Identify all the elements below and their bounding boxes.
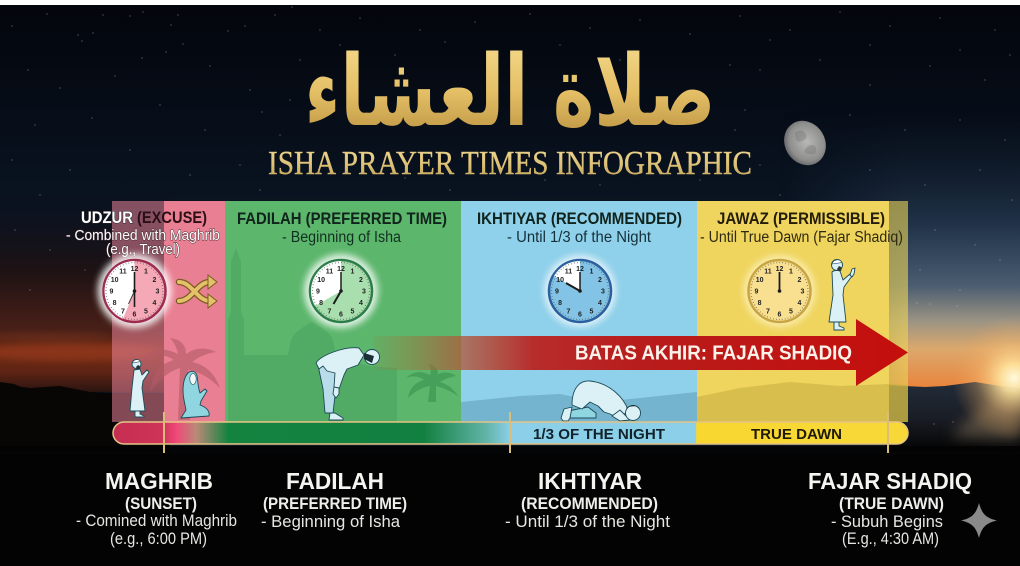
clock: udzur: 3	[156, 288, 160, 296]
clock: fadilah: 7	[328, 308, 332, 315]
clock: jawaz: 12	[776, 266, 783, 273]
label: maghrib: (e.g., 6:00 PM)	[110, 530, 207, 548]
clock: fadilah: 10	[317, 277, 325, 284]
clock: udzur: 10	[111, 277, 119, 284]
icon: sparkle	[961, 503, 997, 538]
clock: udzur: 6	[133, 312, 137, 318]
clock: ikhtiyar: 5	[590, 308, 594, 315]
heading: ikhtiyar: - Until 1/3 of the Night	[507, 229, 652, 246]
clock: jawaz: 1	[789, 269, 793, 276]
label: ikhtiyar	[505, 468, 670, 531]
figure: prostrating man	[561, 381, 640, 421]
clock: jawaz: 11	[764, 269, 772, 276]
clock: jawaz: 2	[797, 277, 801, 284]
panel: ikhtiyar	[461, 201, 697, 422]
clock: fadilah: 3	[362, 288, 366, 296]
clock: ikhtiyar: 1	[590, 269, 594, 276]
panel: fadilah	[225, 201, 461, 422]
label: maghrib: - Comined with Maghrib	[76, 512, 237, 530]
figure: standing man, jawaz	[829, 260, 855, 330]
figure: bowing man	[316, 348, 380, 420]
heading: fadilah	[237, 210, 447, 246]
clock: jawaz: 5	[789, 308, 793, 315]
clock: ikhtiyar: 8	[558, 300, 562, 307]
clock: udzur: 7	[121, 308, 125, 315]
timeline bar	[113, 412, 908, 453]
clock: udzur: 12	[131, 266, 138, 273]
clock: ikhtiyar	[544, 255, 616, 327]
clock: ikhtiyar: 11	[565, 269, 572, 276]
clock: jawaz: 9	[755, 288, 759, 296]
clock: fadilah: 5	[351, 308, 355, 315]
bar label: one third of the night: 1/3 OF THE NIGHT	[533, 426, 665, 443]
clock: jawaz: 7	[766, 308, 770, 315]
bar label: true dawn: TRUE DAWN	[751, 426, 842, 443]
clock: udzur: 11	[119, 269, 127, 276]
clock: jawaz: 10	[756, 277, 764, 284]
label: fadilah	[261, 468, 407, 531]
clock: ikhtiyar: 4	[598, 300, 602, 307]
panel: udzur	[112, 201, 225, 422]
clock: ikhtiyar: 6	[578, 312, 582, 318]
label: ikhtiyar: - Until 1/3 of the Night	[505, 513, 670, 531]
clock: jawaz: 3	[801, 288, 805, 296]
clock: jawaz	[744, 255, 816, 327]
arrow: batas akhir	[373, 319, 908, 386]
heading: fadilah: - Beginning of Isha	[282, 229, 401, 246]
palm silhouette: udzur	[140, 338, 220, 420]
label: fadilah: - Beginning of Isha	[261, 513, 401, 531]
clock: jawaz: 4	[797, 300, 801, 307]
heading: fadilah: FADILAH (PREFERRED TIME)	[237, 210, 447, 228]
label: fajar shadiq: FAJAR SHADIQ	[808, 468, 972, 494]
clock: udzur: 8	[113, 300, 117, 307]
clock: ikhtiyar: 3	[601, 288, 605, 296]
panel: jawaz	[697, 201, 908, 422]
heading: udzur: - Combined with Maghrib	[66, 227, 220, 244]
arrow label: BATAS AKHIR: FAJAR SHADIQ	[575, 342, 852, 364]
clock: fadilah: 1	[351, 269, 355, 276]
label: fajar shadiq: (TRUE DAWN)	[839, 494, 944, 513]
clock: fadilah: 6	[339, 312, 343, 318]
palm silhouette: fadilah	[406, 364, 458, 402]
clock: udzur: 4	[152, 300, 156, 307]
heading: jawaz: JAWAZ (PERMISSIBLE)	[717, 210, 885, 228]
clock: jawaz: 6	[778, 312, 782, 318]
mosque silhouette	[228, 248, 397, 421]
label: fadilah: (PREFERRED TIME)	[263, 494, 407, 513]
label: fajar shadiq: - Subuh Begins	[831, 513, 943, 531]
icon: moon	[776, 113, 834, 173]
label: maghrib: (SUNSET)	[125, 494, 197, 513]
label: fajar shadiq	[808, 468, 972, 548]
clock: udzur: 1	[144, 269, 148, 276]
label: ikhtiyar: IKHTIYAR	[538, 468, 642, 494]
clock: ikhtiyar: 2	[598, 277, 602, 284]
label: fajar shadiq: (E.g., 4:30 AM)	[842, 530, 939, 548]
subtitle: ISHA PRAYER TIMES INFOGRAPHIC	[268, 145, 752, 182]
label: maghrib: MAGHRIB	[105, 468, 213, 494]
clock: fadilah: 9	[316, 288, 320, 296]
heading: jawaz	[700, 210, 903, 246]
figure: standing man, udzur	[130, 360, 149, 417]
heading: ikhtiyar	[477, 210, 682, 246]
title: Arabic calligraphy: صلاة العشاء	[304, 35, 716, 149]
clock: udzur	[98, 254, 172, 328]
label: maghrib	[76, 468, 237, 548]
mountains: ikhtiyar	[461, 392, 697, 422]
clock: fadilah	[304, 254, 378, 328]
label: fadilah: FADILAH	[286, 468, 384, 494]
heading: ikhtiyar: IKHTIYAR (RECOMMENDED)	[477, 210, 682, 228]
clock: fadilah: 2	[359, 277, 363, 284]
clock: ikhtiyar: 12	[576, 266, 584, 273]
heading: udzur: (EXCUSE)	[137, 209, 207, 227]
label: ikhtiyar: (RECOMMENDED)	[521, 494, 658, 513]
figure: kneeling woman	[181, 371, 209, 418]
clock: ikhtiyar: 10	[556, 277, 564, 284]
clock: udzur: 9	[110, 288, 114, 296]
heading: udzur	[66, 209, 220, 258]
clock: fadilah: 4	[359, 300, 363, 307]
clock: udzur: 2	[152, 277, 156, 284]
background: night sky and sunset	[0, 0, 1020, 446]
clock: fadilah: 11	[326, 269, 333, 276]
clock: udzur: 5	[144, 308, 148, 315]
clock: jawaz: 8	[758, 300, 762, 307]
heading: jawaz: - Until True Dawn (Fajar Shadiq)	[700, 229, 903, 246]
icon: shuffle arrows	[179, 275, 217, 308]
heading: udzur: (e.g., Travel)	[106, 241, 180, 258]
clock: fadilah: 8	[319, 300, 323, 307]
clock: ikhtiyar: 9	[555, 288, 559, 296]
clock: ikhtiyar: 7	[567, 308, 571, 315]
clock: fadilah: 12	[337, 266, 345, 273]
heading: udzur: UDZUR	[81, 209, 133, 227]
mountains: jawaz	[697, 382, 908, 422]
